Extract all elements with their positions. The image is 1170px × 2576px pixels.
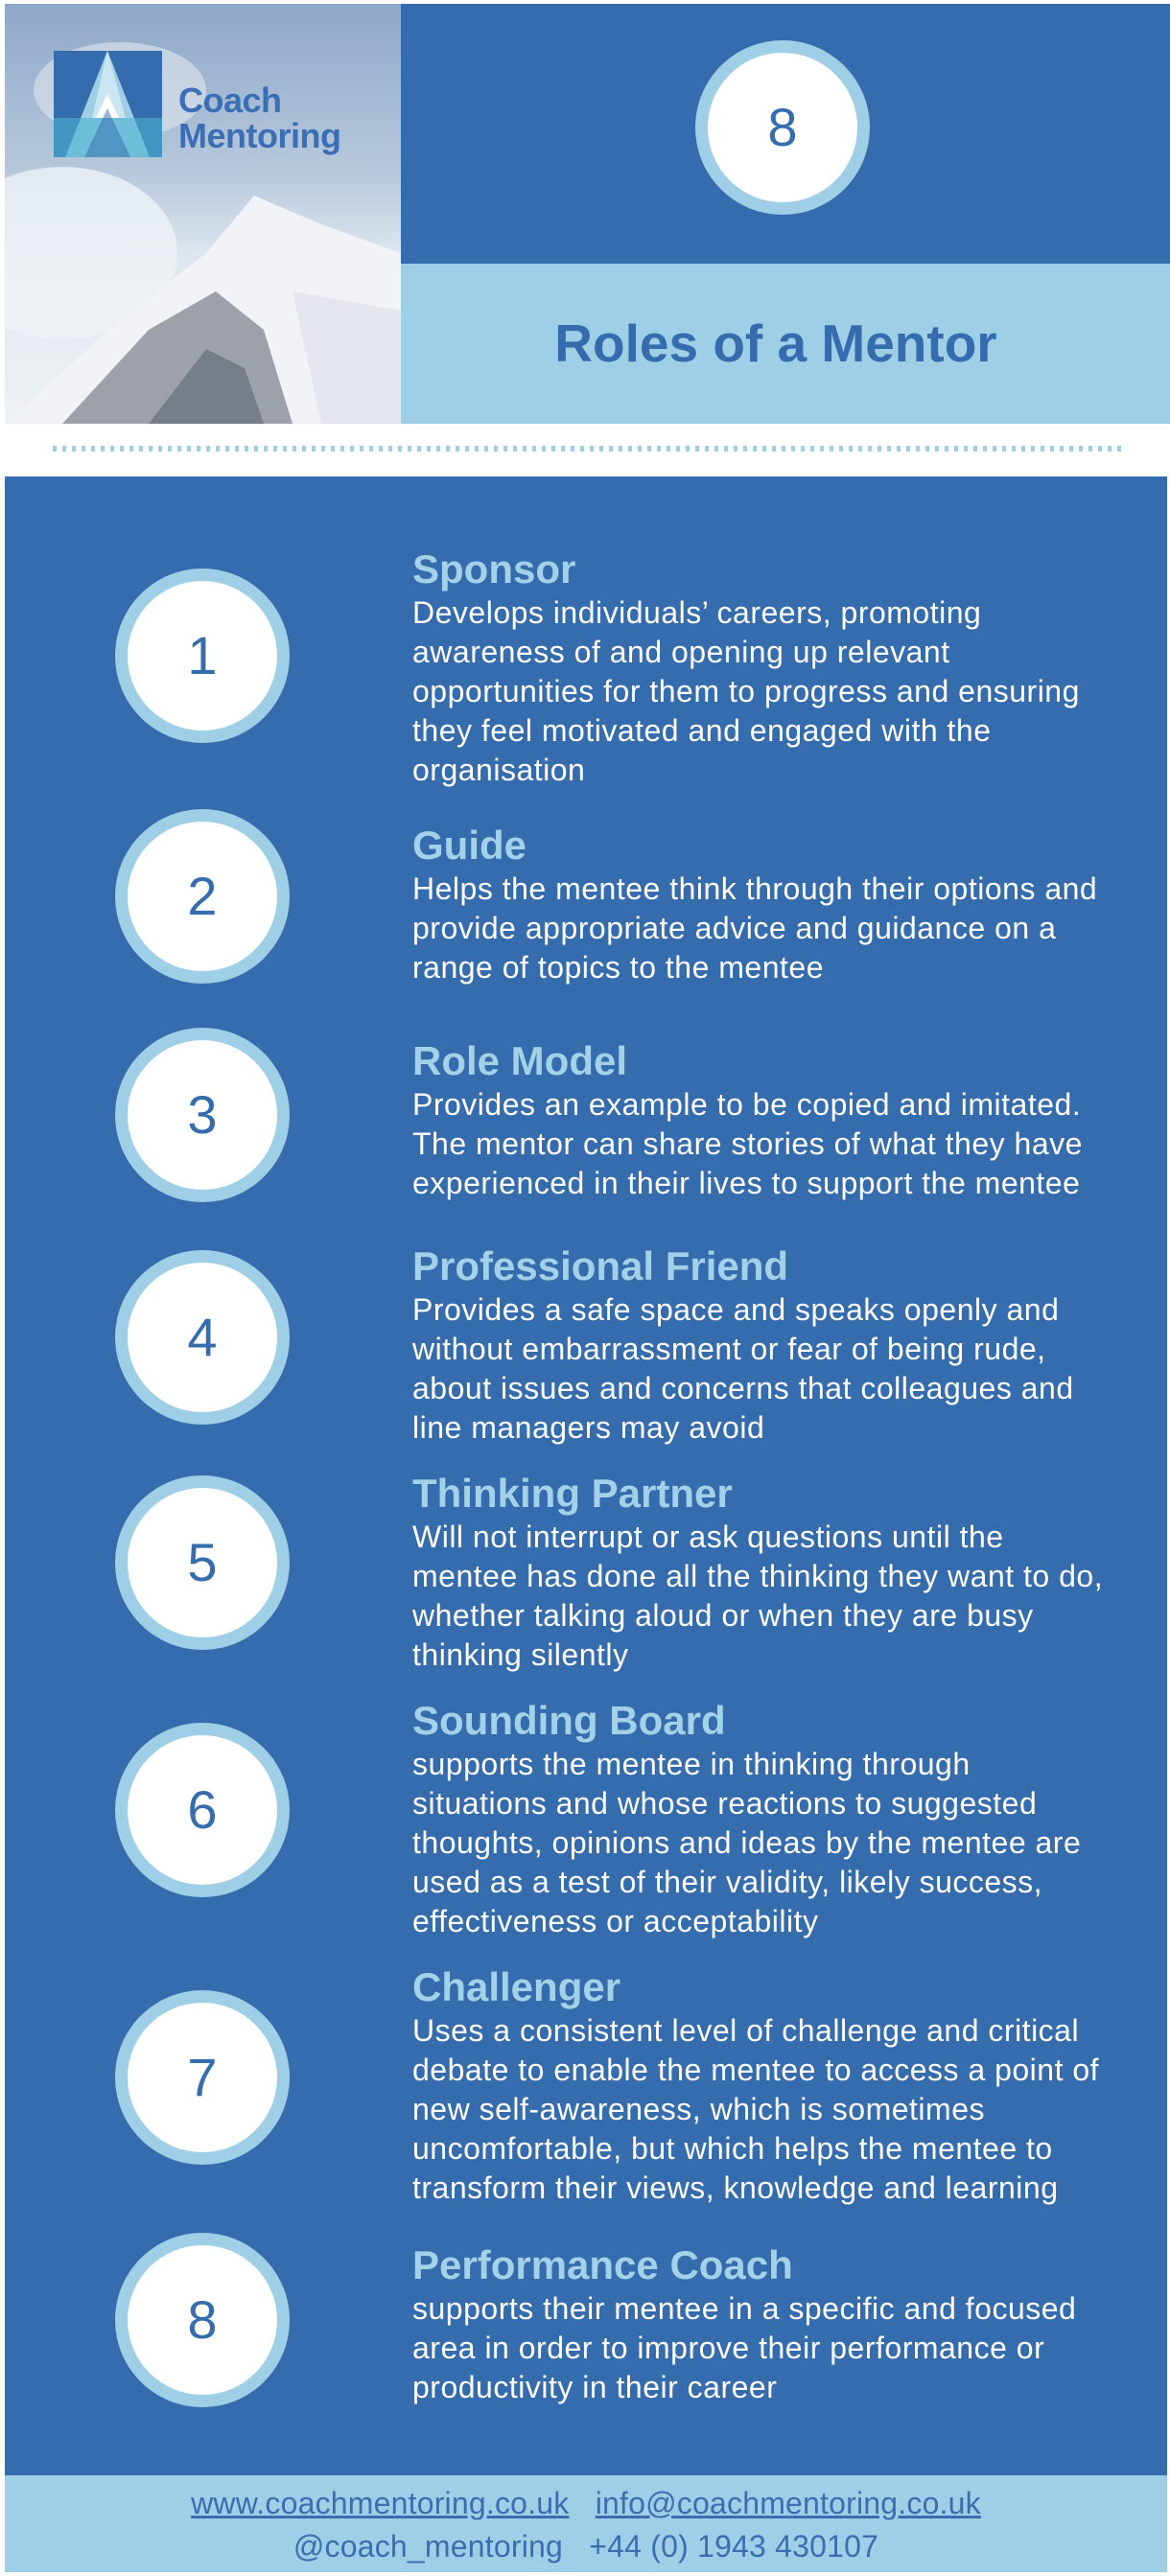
role 2: range of topics to the mentee: [412, 950, 824, 985]
role 7: [115, 1964, 1099, 2205]
title: Roles of a Mentor: [554, 313, 997, 373]
number badge: [695, 40, 870, 215]
role 3: [115, 1028, 1083, 1202]
footer contacts: [5, 2475, 1167, 2572]
role 6: Sounding Board: [412, 1698, 726, 1743]
role 8: productivity in their career: [412, 2370, 777, 2404]
role 4: [115, 1243, 1074, 1445]
role 3: 3: [187, 1084, 218, 1145]
role 1: [115, 546, 1080, 787]
role 4: 4: [187, 1307, 218, 1367]
role 6: [115, 1698, 1081, 1938]
role 7: transform their views, knowledge and learning: [412, 2170, 1059, 2205]
role 3: The mentor can share stories of what they have: [412, 1126, 1083, 1161]
role 6: 6: [187, 1779, 218, 1840]
header top panel with number: [401, 4, 1170, 264]
role 6: effectiveness or acceptability: [412, 1904, 819, 1938]
role 5: thinking silently: [412, 1637, 629, 1672]
role 1: 1: [187, 625, 218, 685]
role 2: 2: [187, 866, 218, 926]
role 7: Challenger: [412, 1964, 620, 2009]
header photo panel: [5, 4, 401, 424]
role 4: without embarrassment or fear of being rude,: [412, 1332, 1046, 1366]
icon: mountain logo: [54, 51, 162, 157]
role 7: Uses a consistent level of challenge and critical: [412, 2013, 1079, 2048]
role 2: Guide: [412, 823, 526, 868]
role 8: 8: [187, 2289, 218, 2350]
role 8: supports their mentee in a specific and focused: [412, 2291, 1076, 2326]
role 3: experienced in their lives to support the mentee: [412, 1166, 1080, 1200]
role 2: Helps the mentee think through their options and: [412, 871, 1097, 906]
role 1: Develops individuals’ careers, promoting: [412, 595, 981, 630]
role 5: Thinking Partner: [412, 1471, 733, 1516]
role 7: debate to enable the mentee to access a point of: [412, 2053, 1099, 2087]
role 5: Will not interrupt or ask questions until the: [412, 1520, 1004, 1554]
logo: Coach: [178, 81, 282, 120]
role 4: Professional Friend: [412, 1243, 788, 1288]
logo: [54, 51, 340, 157]
number badge: 8: [767, 97, 798, 157]
main panel: roles: [5, 476, 1167, 2475]
role 1: they feel motivated and engaged with the: [412, 713, 992, 748]
logo: Mentoring: [178, 116, 340, 155]
role 5: whether talking aloud or when they are busy: [412, 1598, 1034, 1633]
role 6: situations and whose reactions to suggested: [412, 1786, 1037, 1821]
role 4: line managers may avoid: [412, 1410, 764, 1445]
role 2: [115, 809, 1097, 985]
role 8: area in order to improve their performance or: [412, 2331, 1044, 2365]
role 5: 5: [187, 1532, 218, 1592]
role 1: awareness of and opening up relevant: [412, 635, 950, 669]
role 1: organisation: [412, 753, 585, 787]
role 5: mentee has done all the thinking they want to do,: [412, 1559, 1103, 1593]
role 2: provide appropriate advice and guidance on a: [412, 911, 1056, 945]
role 6: thoughts, opinions and ideas by the mentee are: [412, 1825, 1081, 1860]
role 1: opportunities for them to progress and ensuring: [412, 674, 1080, 708]
role 4: Provides a safe space and speaks openly and: [412, 1292, 1059, 1327]
role 8: [115, 2233, 1076, 2407]
footer contacts: www.coachmentoring.co.uk info@coachmentoring.co.uk: [191, 2486, 981, 2520]
role 4: about issues and concerns that colleagues and: [412, 1371, 1074, 1405]
role 7: new self-awareness, which is sometimes: [412, 2092, 985, 2126]
role 7: uncomfortable, but which helps the mentee to: [412, 2131, 1053, 2166]
role 5: [115, 1471, 1103, 1672]
title: [401, 264, 1170, 424]
footer contacts: @coach_mentoring +44 (0) 1943 430107: [293, 2529, 878, 2564]
role 6: supports the mentee in thinking through: [412, 1747, 971, 1781]
role 6: used as a test of their validity, likely success,: [412, 1865, 1042, 1899]
role 1: Sponsor: [412, 546, 575, 592]
role 3: Role Model: [412, 1038, 627, 1083]
role 8: Performance Coach: [412, 2242, 793, 2287]
role 3: Provides an example to be copied and imitated.: [412, 1087, 1081, 1122]
role 7: 7: [187, 2047, 218, 2107]
